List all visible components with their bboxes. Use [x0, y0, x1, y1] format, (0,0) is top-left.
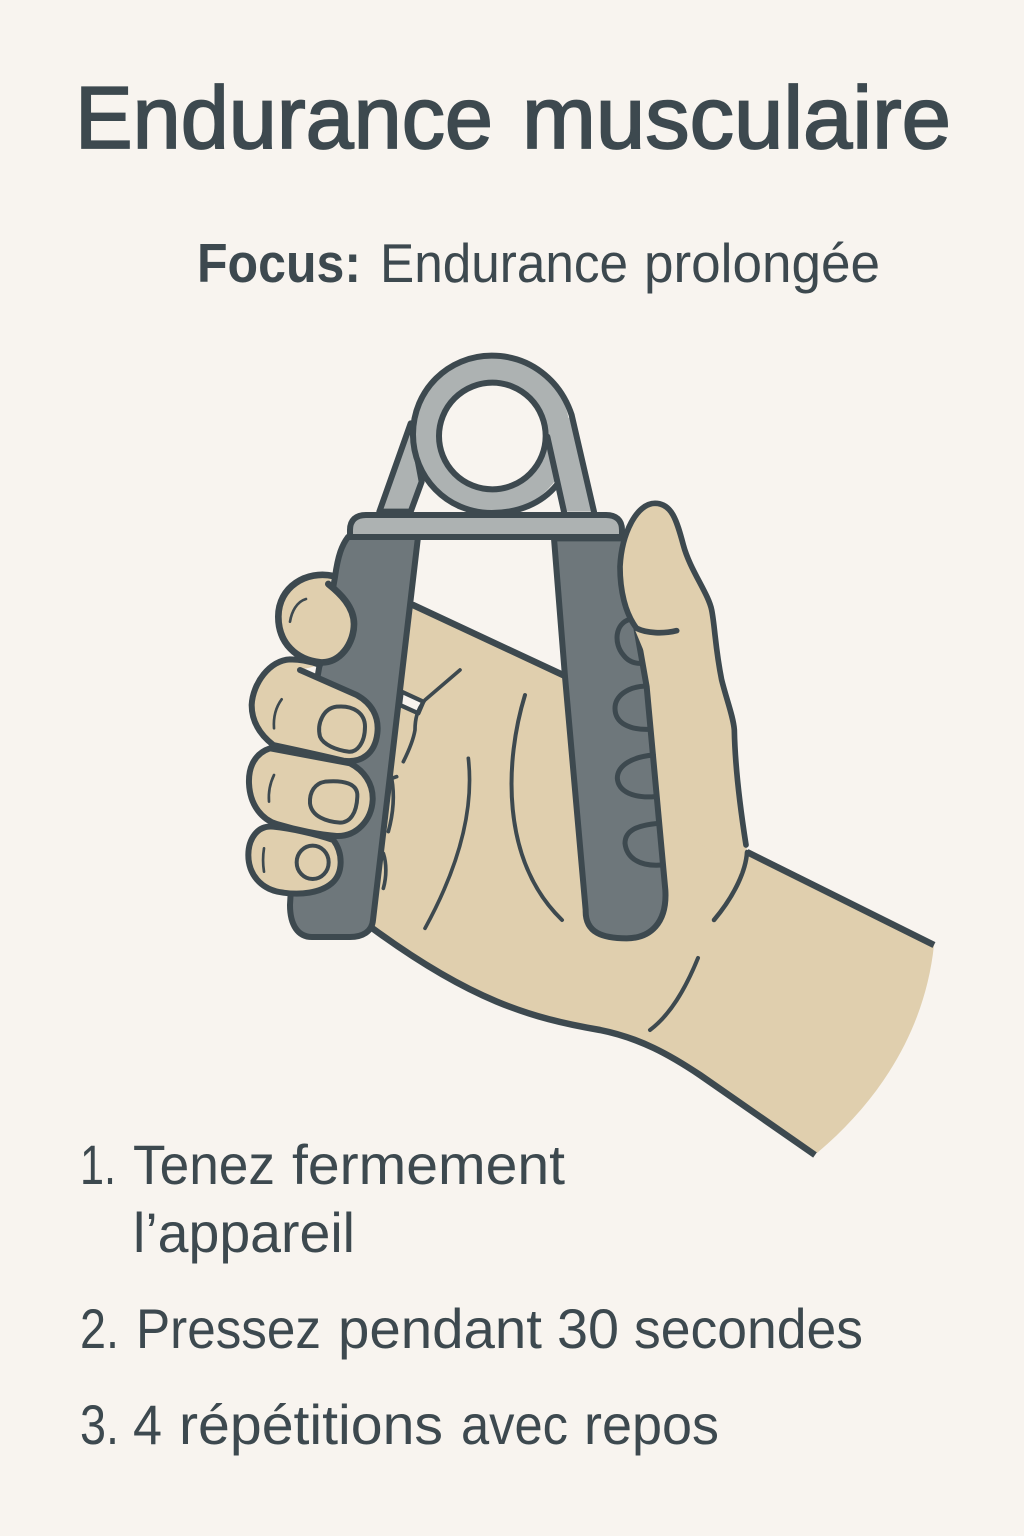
- middle finger: [252, 659, 378, 761]
- subtitle: focus: Endurance: [380, 232, 628, 294]
- step 3: répétitions: [179, 1393, 443, 1456]
- gripper: spring coil: [379, 356, 594, 513]
- step 1: 1.: [80, 1133, 116, 1196]
- step 1: l’appareil: [133, 1201, 355, 1264]
- illustration: hand squeezing a hand gripper: [248, 356, 934, 1155]
- step 1: Tenez: [133, 1133, 275, 1196]
- fingers: [248, 575, 378, 894]
- subtitle: focus: Focus:: [197, 232, 361, 294]
- hand: palm and wrist: [372, 560, 934, 1155]
- step 3: repos: [584, 1393, 719, 1456]
- step 2: pendant: [338, 1297, 542, 1360]
- step 3: avec: [461, 1393, 568, 1456]
- gripper: left handle: [290, 537, 418, 937]
- subtitle: focus: prolongée: [644, 232, 880, 294]
- right handle finger grooves: [615, 619, 662, 865]
- title: [75, 68, 951, 167]
- gripper: crossbar: [350, 515, 622, 537]
- step 2: [80, 1297, 863, 1360]
- step 3: 3.: [80, 1393, 119, 1456]
- step 3: 4: [133, 1393, 162, 1456]
- step 3: [80, 1393, 719, 1456]
- thumb: [620, 503, 746, 873]
- subtitle: focus: [197, 232, 880, 294]
- gripper: right handle: [554, 538, 665, 938]
- ring finger: [249, 748, 373, 836]
- little finger: [248, 827, 341, 894]
- step 2: secondes: [634, 1297, 863, 1360]
- title: Endurance: [75, 68, 493, 167]
- step 2: 30: [557, 1297, 619, 1360]
- instructions list: [80, 1133, 863, 1456]
- step 2: Pressez: [136, 1297, 321, 1360]
- step 2: 2.: [80, 1297, 119, 1360]
- palm creases and gap: [383, 670, 470, 928]
- step 1: fermement: [292, 1133, 565, 1196]
- step 1: [80, 1133, 565, 1264]
- title: musculaire: [522, 68, 951, 167]
- index finger: [278, 575, 354, 662]
